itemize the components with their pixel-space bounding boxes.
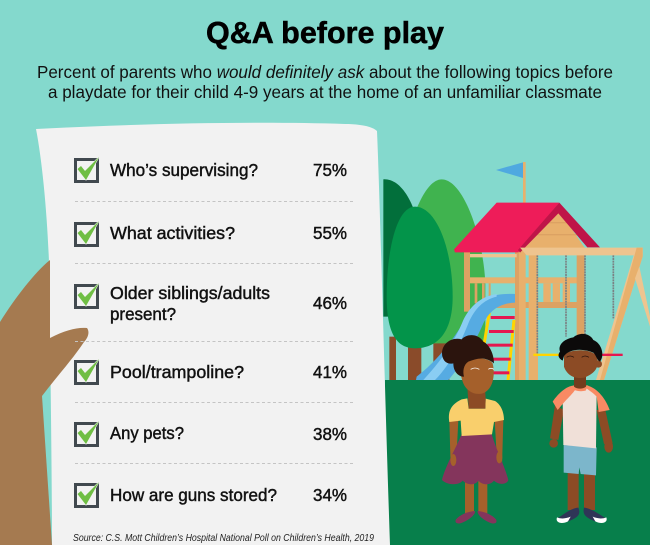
neck [574, 373, 586, 389]
row: Older siblings: 46% [313, 293, 347, 313]
trunks [389, 337, 449, 382]
legs [568, 472, 595, 510]
head [564, 350, 598, 378]
posts and rails [464, 250, 585, 380]
boy [549, 334, 613, 523]
shirt [449, 398, 504, 436]
row: Pool/trampoline: Pool/trampoline? [110, 362, 244, 382]
row: Who's supervising: 75% [313, 160, 347, 180]
hand [0, 260, 88, 545]
trees [383, 179, 485, 382]
subtitle: Percent of parents who would definitely ask about the following topics before [37, 62, 613, 82]
slide [416, 294, 515, 380]
shoes [455, 511, 496, 523]
playset [416, 162, 650, 380]
row: Older siblings: Older siblings/adults [110, 283, 270, 303]
swing seats [533, 354, 623, 356]
eyes [471, 368, 494, 369]
row: Pool/trampoline [76, 359, 347, 384]
row: Who's supervising: Who’s supervising? [110, 160, 258, 180]
checkbox [76, 359, 99, 384]
checkbox [76, 283, 99, 308]
swing chains [537, 255, 613, 353]
row: What activities: 55% [313, 223, 347, 243]
row: How are guns stored [76, 482, 347, 506]
hair [442, 335, 494, 377]
row: Pool/trampoline: 41% [313, 362, 347, 382]
dark tree [383, 179, 423, 317]
row: Any pets: Any pets? [110, 423, 184, 443]
arms [449, 420, 503, 467]
row: How are guns stored: 34% [313, 485, 347, 505]
shoes [557, 508, 607, 523]
mid tree [387, 207, 453, 348]
hands [450, 451, 502, 466]
checkbox [76, 421, 99, 446]
checkbox [76, 482, 99, 506]
row: Older siblings: present? [110, 304, 176, 324]
title: Q&A before play [206, 15, 445, 50]
subtitle [37, 62, 613, 102]
sleeves [553, 385, 610, 412]
checkbox [76, 221, 99, 246]
row: Any pets [76, 421, 347, 446]
paper [36, 123, 390, 545]
swing frame [520, 248, 650, 380]
legs [465, 480, 487, 513]
arms [549, 405, 613, 453]
girl [442, 335, 508, 523]
ladder [484, 313, 515, 380]
skirt [442, 434, 508, 484]
shorts [564, 445, 597, 475]
neck [467, 387, 486, 409]
row: Any pets: 38% [313, 424, 347, 444]
row: What activities: What activities? [110, 223, 235, 243]
row: Older siblings [76, 283, 347, 324]
roof and gable [454, 203, 600, 253]
head [461, 358, 494, 394]
checkbox [76, 157, 99, 182]
hair [559, 334, 602, 362]
eyes [567, 356, 589, 357]
subtitle: a playdate for their child 4-9 years at the home of an unfamiliar classmate [48, 82, 602, 102]
ground [385, 380, 650, 545]
row: Who's supervising [76, 157, 347, 182]
row: What activities [76, 221, 347, 246]
row: How are guns stored: How are guns stored? [110, 485, 277, 505]
source: Source: C.S. Mott Children’s Hospital National Poll on Children’s Health, 2019 [73, 532, 374, 544]
light tree [400, 179, 485, 343]
flag [496, 162, 526, 204]
shirt [563, 387, 597, 448]
